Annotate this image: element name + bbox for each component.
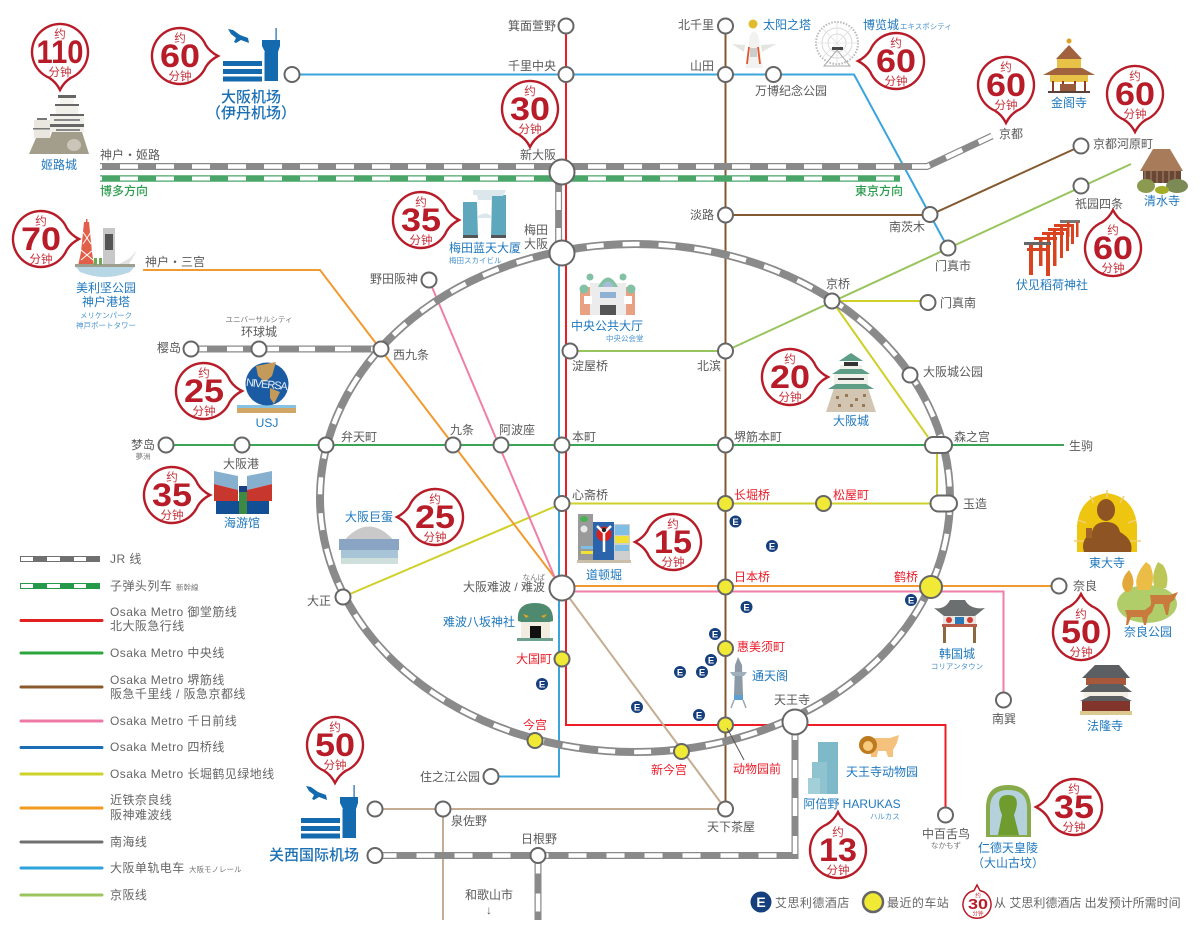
badge: Nara 50 min: 分钟 <box>1070 645 1092 659</box>
hotel markers: E <box>677 668 683 678</box>
badge: Osaka Castle 20 min: 约 <box>784 352 796 366</box>
badge: Umeda Sky 35 min: 35 <box>401 202 441 238</box>
badge: Nara 50 min <box>1053 594 1109 660</box>
label: Harukas: 阿倍野 HARUKAS <box>803 796 901 811</box>
legend JR <box>20 552 142 566</box>
station labels: 西九条 <box>393 348 429 362</box>
station labels: 环球城 <box>241 325 277 339</box>
station labels: 长堀桥 <box>734 487 770 502</box>
label: Central Public Hall: 中央公共大厅 <box>571 318 643 333</box>
legend Midosuji: Osaka Metro 御堂筋线 <box>110 604 237 619</box>
station labels: 奈良 <box>1073 578 1097 593</box>
label: USJ: USJ <box>256 416 278 430</box>
station labels: 樱岛 <box>157 340 181 355</box>
label: Umeda Sky <box>449 240 521 265</box>
legend Sakaisuji: 阪急千里线 / 阪急京都线 <box>110 686 246 701</box>
key: hotel: 艾思利德酒店 <box>775 895 850 910</box>
JR Kobe-Kyoto line <box>100 136 992 253</box>
station labels: 惠美须町 <box>737 640 785 654</box>
hotel markers: E <box>539 680 545 690</box>
hotel markers: E <box>696 710 702 722</box>
key: nearest station <box>863 892 949 912</box>
hotel markers: E <box>634 702 640 714</box>
legend Sakaisuji: Osaka Metro 堺筋线 <box>110 672 225 687</box>
badge: Kawaramachi 60 min: 约 <box>1129 69 1141 83</box>
legend Nankai: 南海线 <box>110 834 147 849</box>
legend JR: JR 线 <box>110 552 142 566</box>
legend Monorail: 大阪单轨电车 <box>110 860 185 875</box>
label: Kinkakuji: 金阁寺 <box>1051 95 1087 110</box>
legend Sennichimae: Osaka Metro 千日前线 <box>110 713 237 728</box>
station markers <box>158 18 1088 863</box>
badge: Nintoku 35 min: 分钟 <box>1062 820 1086 834</box>
badge: Kaiyukan 35 min: 分钟 <box>160 508 184 522</box>
icon: Osaka Castle <box>826 353 876 412</box>
station labels: 大阪港 <box>223 457 259 471</box>
label: Expo City <box>863 17 952 32</box>
badge: Expo City 60 min <box>858 33 924 89</box>
badge: Nintoku 35 min: 35 <box>1054 789 1094 825</box>
legend Shinkansen: 新幹線 <box>176 582 199 592</box>
leader to Dobutsuen-mae <box>727 728 744 760</box>
badge: USJ 25 min <box>176 363 242 419</box>
icon: Abeno Harukas <box>808 742 838 794</box>
JR Yumesaki line <box>191 346 381 352</box>
icon: Kansai airport <box>301 785 358 838</box>
monorail line <box>292 74 948 248</box>
badge: Kansai airport 50 min: 分钟 <box>324 758 346 772</box>
badge: Himeji 110 min: 110 <box>36 34 84 70</box>
icon: USJ globe: NIVERSA <box>245 377 289 393</box>
badge: Kyoto 60 min: 分钟 <box>994 98 1018 112</box>
badge: USJ 25 min: 分钟 <box>192 404 216 418</box>
key: hotel <box>750 892 850 912</box>
key: time badge <box>963 885 1181 918</box>
label: Nintoku tomb: （大山古坟） <box>972 855 1044 870</box>
hotel markers: E <box>732 517 739 528</box>
station labels: 夢洲 <box>136 451 150 461</box>
station labels: 和歌山市 <box>465 887 513 902</box>
Shinkansen line <box>100 175 900 182</box>
badge: Osaka Dome 25 min: 分钟 <box>424 530 446 544</box>
label: Korea Town: 韩国城 <box>939 646 975 661</box>
badge: Osaka Castle 20 min: 分钟 <box>778 390 802 404</box>
badge: Nara 50 min: 50 <box>1061 614 1101 650</box>
station labels: 门真市 <box>935 258 971 273</box>
badge: Expo City 60 min: 约 <box>890 36 902 50</box>
key: time badge: 30 <box>968 896 988 913</box>
hotel markers: E <box>699 668 705 678</box>
legend Kintetsu Hanshin <box>21 792 172 822</box>
Sennichimae pink line <box>429 280 1004 700</box>
JR Hanwa and Kansai line <box>375 722 795 920</box>
badge: Osaka Dome 25 min: 25 <box>415 499 455 535</box>
icon: Kaiyukan aquarium <box>214 471 272 514</box>
badge: Harukas 13 min: 13 <box>819 832 857 868</box>
icon: Expo City Ferris wheel <box>816 22 858 66</box>
label: Kansai airport: 关西国际机场 <box>269 847 359 864</box>
station labels: 大国町 <box>516 652 552 666</box>
legend Nankai <box>21 834 147 849</box>
station labels: 大阪难波 / 难波 <box>463 580 545 594</box>
Kintetsu and Hanshin orange line <box>143 270 1059 586</box>
badge: Osaka Castle 20 min <box>762 349 828 405</box>
badge: Expo City 60 min: 60 <box>876 43 916 79</box>
label: Kaiyukan: 海游馆 <box>224 515 260 530</box>
badge: Umeda Sky 35 min <box>393 192 459 248</box>
label: Central Public Hall: 中央公会堂 <box>606 333 644 343</box>
icon: Himeji castle <box>29 95 89 154</box>
station labels: 山田 <box>690 59 714 73</box>
badge: Fushimi 60 min: 约 <box>1107 223 1119 237</box>
badge: Kansai airport 50 min <box>307 717 363 783</box>
Sakaisuji brown line <box>726 26 1081 809</box>
icon: Osaka Dome <box>339 526 399 564</box>
legend Shinkansen: 子弹头列车 <box>110 578 172 593</box>
badge: Kawaramachi 60 min: 分钟 <box>1124 107 1146 121</box>
station labels: 新今宫 <box>651 762 687 777</box>
legend Yotsubashi: Osaka Metro 四桥线 <box>110 740 225 754</box>
label: Dotonbori: 道顿堀 <box>586 567 622 582</box>
icon: Kobe port tower <box>75 219 137 277</box>
badge: Shin-Osaka 30 min: 约 <box>524 84 536 98</box>
station labels: 淀屋桥 <box>572 359 608 373</box>
label: Horyuji: 法隆寺 <box>1087 718 1123 733</box>
station labels: 東京方向 <box>855 183 903 198</box>
badge: Itami 60 min: 分钟 <box>168 69 192 83</box>
station labels: 玉造 <box>963 497 987 511</box>
station labels: 梅田 <box>524 222 548 237</box>
label: Expo City: 博览城 <box>863 17 899 32</box>
label: Umeda Sky: 梅田スカイビル <box>449 255 502 265</box>
badge: Nintoku 35 min: 约 <box>1068 782 1080 796</box>
station labels: 泉佐野 <box>451 814 487 828</box>
badge: Shin-Osaka 30 min: 30 <box>510 91 550 127</box>
badge: Itami 60 min <box>152 28 218 84</box>
icon: Nintoku tomb <box>986 785 1031 837</box>
badge: Kobe 70 min: 70 <box>21 221 61 257</box>
badge: Itami 60 min: 约 <box>174 31 186 45</box>
station labels: 生驹 <box>1069 438 1093 453</box>
label: Tower of the Sun: 太阳之塔 <box>763 17 811 32</box>
icon: Central Public Hall <box>580 274 636 315</box>
icon: Todaiji Buddha <box>1074 490 1141 552</box>
badge: USJ 25 min: 约 <box>198 366 210 380</box>
badge: Dotonbori 15 min: 分钟 <box>662 555 684 569</box>
station labels: 日本桥 <box>734 570 770 584</box>
station labels: 大阪城公园 <box>923 365 983 379</box>
station labels: 阿波座 <box>499 422 535 437</box>
station labels: 野田阪神 <box>370 272 418 286</box>
hotel markers: E <box>712 630 718 640</box>
icon: Tower of the Sun <box>732 20 776 68</box>
station labels: 北滨 <box>697 358 721 373</box>
key: symbols <box>750 885 1181 918</box>
label: Korea Town: コリアンタウン <box>931 662 983 671</box>
station labels: 九条 <box>450 423 474 437</box>
station labels: 京桥 <box>826 277 850 291</box>
station labels: 北千里 <box>678 18 714 32</box>
hotel markers: E <box>743 602 750 614</box>
JR loop line <box>320 244 950 752</box>
label: Nintoku tomb: 仁德天皇陵 <box>978 840 1038 855</box>
badge: Kyoto 60 min: 约 <box>1000 60 1012 74</box>
badge: Harukas 13 min: 分钟 <box>826 863 850 877</box>
icon: Dotonbori Glico <box>577 514 631 563</box>
legend Midosuji <box>21 604 237 633</box>
station labels: 森之宫 <box>954 429 990 444</box>
icon: Osaka Itami airport <box>223 28 280 82</box>
badge: Shin-Osaka 30 min: 分钟 <box>518 122 542 136</box>
label: Umeda Sky: 梅田蓝天大厦 <box>449 240 521 255</box>
label: Harukas: ハルカス <box>870 812 900 821</box>
legend Kintetsu Hanshin: 阪神难波线 <box>110 808 172 822</box>
label: Kiyomizu: 清水寺 <box>1144 194 1180 208</box>
legend Shinkansen <box>20 578 199 593</box>
station labels: 南巽 <box>992 711 1016 726</box>
icon: Tsutenkaku <box>730 657 747 708</box>
key: time badge: 分钟 <box>972 910 984 918</box>
badge: Kobe 70 min <box>13 211 79 267</box>
badge: Fushimi 60 min <box>1085 210 1141 276</box>
Midosuji red line <box>566 26 946 815</box>
key: time badge: 从 艾思利德酒店 出发预计所需时间 <box>994 895 1181 910</box>
station labels: なんば <box>522 573 545 582</box>
label: Itami airport: （伊丹机场） <box>206 105 296 122</box>
station labels: 天下茶屋 <box>707 819 755 834</box>
key: nearest station: 最近的车站 <box>887 895 949 910</box>
badge: Osaka Castle 20 min: 20 <box>770 359 810 395</box>
station labels: なかもず <box>931 840 961 850</box>
badge: Shin-Osaka 30 min <box>502 81 558 147</box>
label: Meriken park: メリケンパーク <box>80 311 132 320</box>
badge: Umeda Sky 35 min: 分钟 <box>410 233 432 247</box>
icon: Umeda Sky Building <box>463 190 506 238</box>
hotel markers: E <box>769 542 775 552</box>
hotel markers <box>536 516 917 722</box>
label: Meriken park: 美利坚公园 <box>76 281 136 295</box>
station labels: 博多方向 <box>100 183 148 198</box>
label: Osaka Castle: 大阪城 <box>833 414 869 428</box>
badge: Kawaramachi 60 min <box>1107 66 1163 132</box>
station labels: 住之江公园 <box>420 770 480 784</box>
label: Itami airport: 大阪机场 <box>221 89 281 106</box>
label: Tennoji Zoo: 天王寺动物园 <box>846 765 918 779</box>
label: Fushimi Inari: 伏见稻荷神社 <box>1016 277 1088 292</box>
badge: Kansai airport 50 min: 约 <box>329 720 341 734</box>
Nagahori yellow line <box>343 301 944 597</box>
station labels: 松屋町 <box>833 488 869 502</box>
legend Monorail: 大阪モノレール <box>189 864 242 874</box>
label: Osaka Dome: 大阪巨蛋 <box>345 510 393 524</box>
station labels: 动物园前 <box>733 761 781 776</box>
label: Harukas <box>803 796 901 821</box>
key: hotel: E <box>756 894 766 910</box>
badge: Kawaramachi 60 min: 60 <box>1115 76 1155 112</box>
station labels: 日根野 <box>521 832 557 846</box>
station labels: 本町 <box>572 430 596 444</box>
station labels: 万博纪念公园 <box>755 83 827 98</box>
badge: Himeji 110 min: 分钟 <box>48 65 72 79</box>
badge: Osaka Dome 25 min <box>397 489 463 545</box>
station labels: 千里中央 <box>508 58 556 73</box>
badge: Kaiyukan 35 min <box>144 467 210 523</box>
station labels: 弁天町 <box>341 429 377 444</box>
station labels: 梦岛 <box>131 437 155 452</box>
station labels: 大阪 <box>524 237 548 251</box>
Chuo green line <box>166 444 1064 446</box>
badge: Nara 50 min: 约 <box>1075 607 1087 621</box>
label: Expo City: エキスポシティ <box>900 22 952 31</box>
station labels: 箕面萱野 <box>508 19 556 33</box>
station labels: 堺筋本町 <box>734 429 782 444</box>
station labels: ユニバーサルシティ <box>226 315 292 324</box>
station labels: 新大阪 <box>520 147 556 162</box>
legend Nagahori: Osaka Metro 长堀鹤见绿地线 <box>110 766 275 781</box>
label: Tsutenkaku: 通天阁 <box>752 669 788 683</box>
station labels: 神户・三宫 <box>145 254 205 269</box>
badge: Expo City 60 min: 分钟 <box>884 74 908 88</box>
icon: Horyuji <box>1080 665 1132 715</box>
label: Nara park: 奈良公园 <box>1124 624 1172 639</box>
icon: Kiyomizu temple <box>1137 149 1188 194</box>
station labels: 大正 <box>307 594 331 608</box>
badge: Kyoto 60 min: 60 <box>986 67 1026 103</box>
badge: Kobe 70 min: 约 <box>35 214 47 228</box>
badge: Harukas 13 min: 约 <box>832 825 844 839</box>
icon: Kinkakuji <box>1043 38 1095 93</box>
badge: Itami 60 min: 60 <box>160 38 200 74</box>
legend Kintetsu Hanshin: 近铁奈良线 <box>110 792 172 807</box>
station labels: 中百舌鸟 <box>922 826 970 841</box>
badge: Dotonbori 15 min: 约 <box>667 517 679 531</box>
icon: Fushimi Inari torii <box>1024 220 1080 276</box>
icon: Tennoji zoo lion <box>859 735 899 757</box>
badge: Kansai airport 50 min: 50 <box>315 727 355 763</box>
badge: Himeji 110 min: 约 <box>54 27 66 41</box>
icon: Namba Yasaka shrine <box>517 603 553 641</box>
station labels: 神户・姬路 <box>100 147 160 162</box>
label: Central Public Hall <box>571 318 644 343</box>
legend: line types <box>20 552 275 902</box>
label: Himeji: 姬路城 <box>41 157 77 172</box>
station labels: 今宫 <box>523 717 547 732</box>
label: Nintoku tomb <box>972 840 1044 870</box>
hotel markers: E <box>908 596 914 606</box>
station labels: 南茨木 <box>889 219 925 234</box>
badge: USJ 25 min: 25 <box>184 373 224 409</box>
badge: Kobe 70 min: 分钟 <box>30 252 52 266</box>
label: Meriken park: 神戸ポートタワー <box>76 320 136 330</box>
badge: Kyoto 60 min <box>978 57 1034 123</box>
station labels: 鹤桥 <box>894 569 918 584</box>
badge: Osaka Dome 25 min: 约 <box>429 492 441 506</box>
station labels: 门真南 <box>940 295 976 310</box>
badge: Kaiyukan 35 min: 约 <box>166 470 178 484</box>
badge: Fushimi 60 min: 分钟 <box>1102 261 1124 275</box>
badge: Kaiyukan 35 min: 35 <box>152 477 192 513</box>
station labels: 淡路 <box>690 207 714 222</box>
station labels: 心斋桥 <box>572 487 608 502</box>
legend Keihan <box>21 888 147 902</box>
badge: Nintoku 35 min <box>1036 779 1102 835</box>
legend Monorail <box>21 860 242 875</box>
badge: Fushimi 60 min: 60 <box>1093 230 1133 266</box>
legend Sakaisuji <box>21 672 246 701</box>
Yotsubashi line <box>491 253 559 776</box>
label: Korea Town <box>931 646 983 671</box>
badge: Umeda Sky 35 min: 约 <box>415 195 427 209</box>
hotel markers: E <box>708 656 714 666</box>
icon: Nara park deer <box>1117 562 1178 625</box>
station labels: 祇园四条 <box>1075 197 1123 211</box>
label: Meriken park <box>76 281 136 330</box>
label: Itami airport <box>206 89 296 122</box>
key: time badge: 约 <box>975 892 981 900</box>
label: Todaiji: 東大寺 <box>1089 556 1125 570</box>
station labels: 天王寺 <box>774 693 810 707</box>
station labels: 京都 <box>999 127 1023 141</box>
legend Midosuji: 北大阪急行线 <box>110 618 185 633</box>
label: Namba Yasaka: 难波八坂神社 <box>443 614 515 629</box>
station labels: 京都河原町 <box>1093 137 1153 151</box>
badge: Dotonbori 15 min <box>635 514 701 570</box>
icon: Korea Town gate <box>934 600 985 643</box>
badge: Himeji 110 min <box>32 24 88 90</box>
badge: Harukas 13 min <box>810 812 866 878</box>
icon: USJ globe <box>237 362 296 413</box>
legend Keihan: 京阪线 <box>110 888 147 902</box>
legend Chuo: Osaka Metro 中央线 <box>110 645 225 660</box>
Keihan line <box>570 164 1131 351</box>
badge: Dotonbori 15 min: 15 <box>654 524 692 560</box>
label: Meriken park: 神户港塔 <box>82 294 130 309</box>
station labels: ↓ <box>486 903 492 917</box>
Nankai tan line <box>375 588 726 920</box>
